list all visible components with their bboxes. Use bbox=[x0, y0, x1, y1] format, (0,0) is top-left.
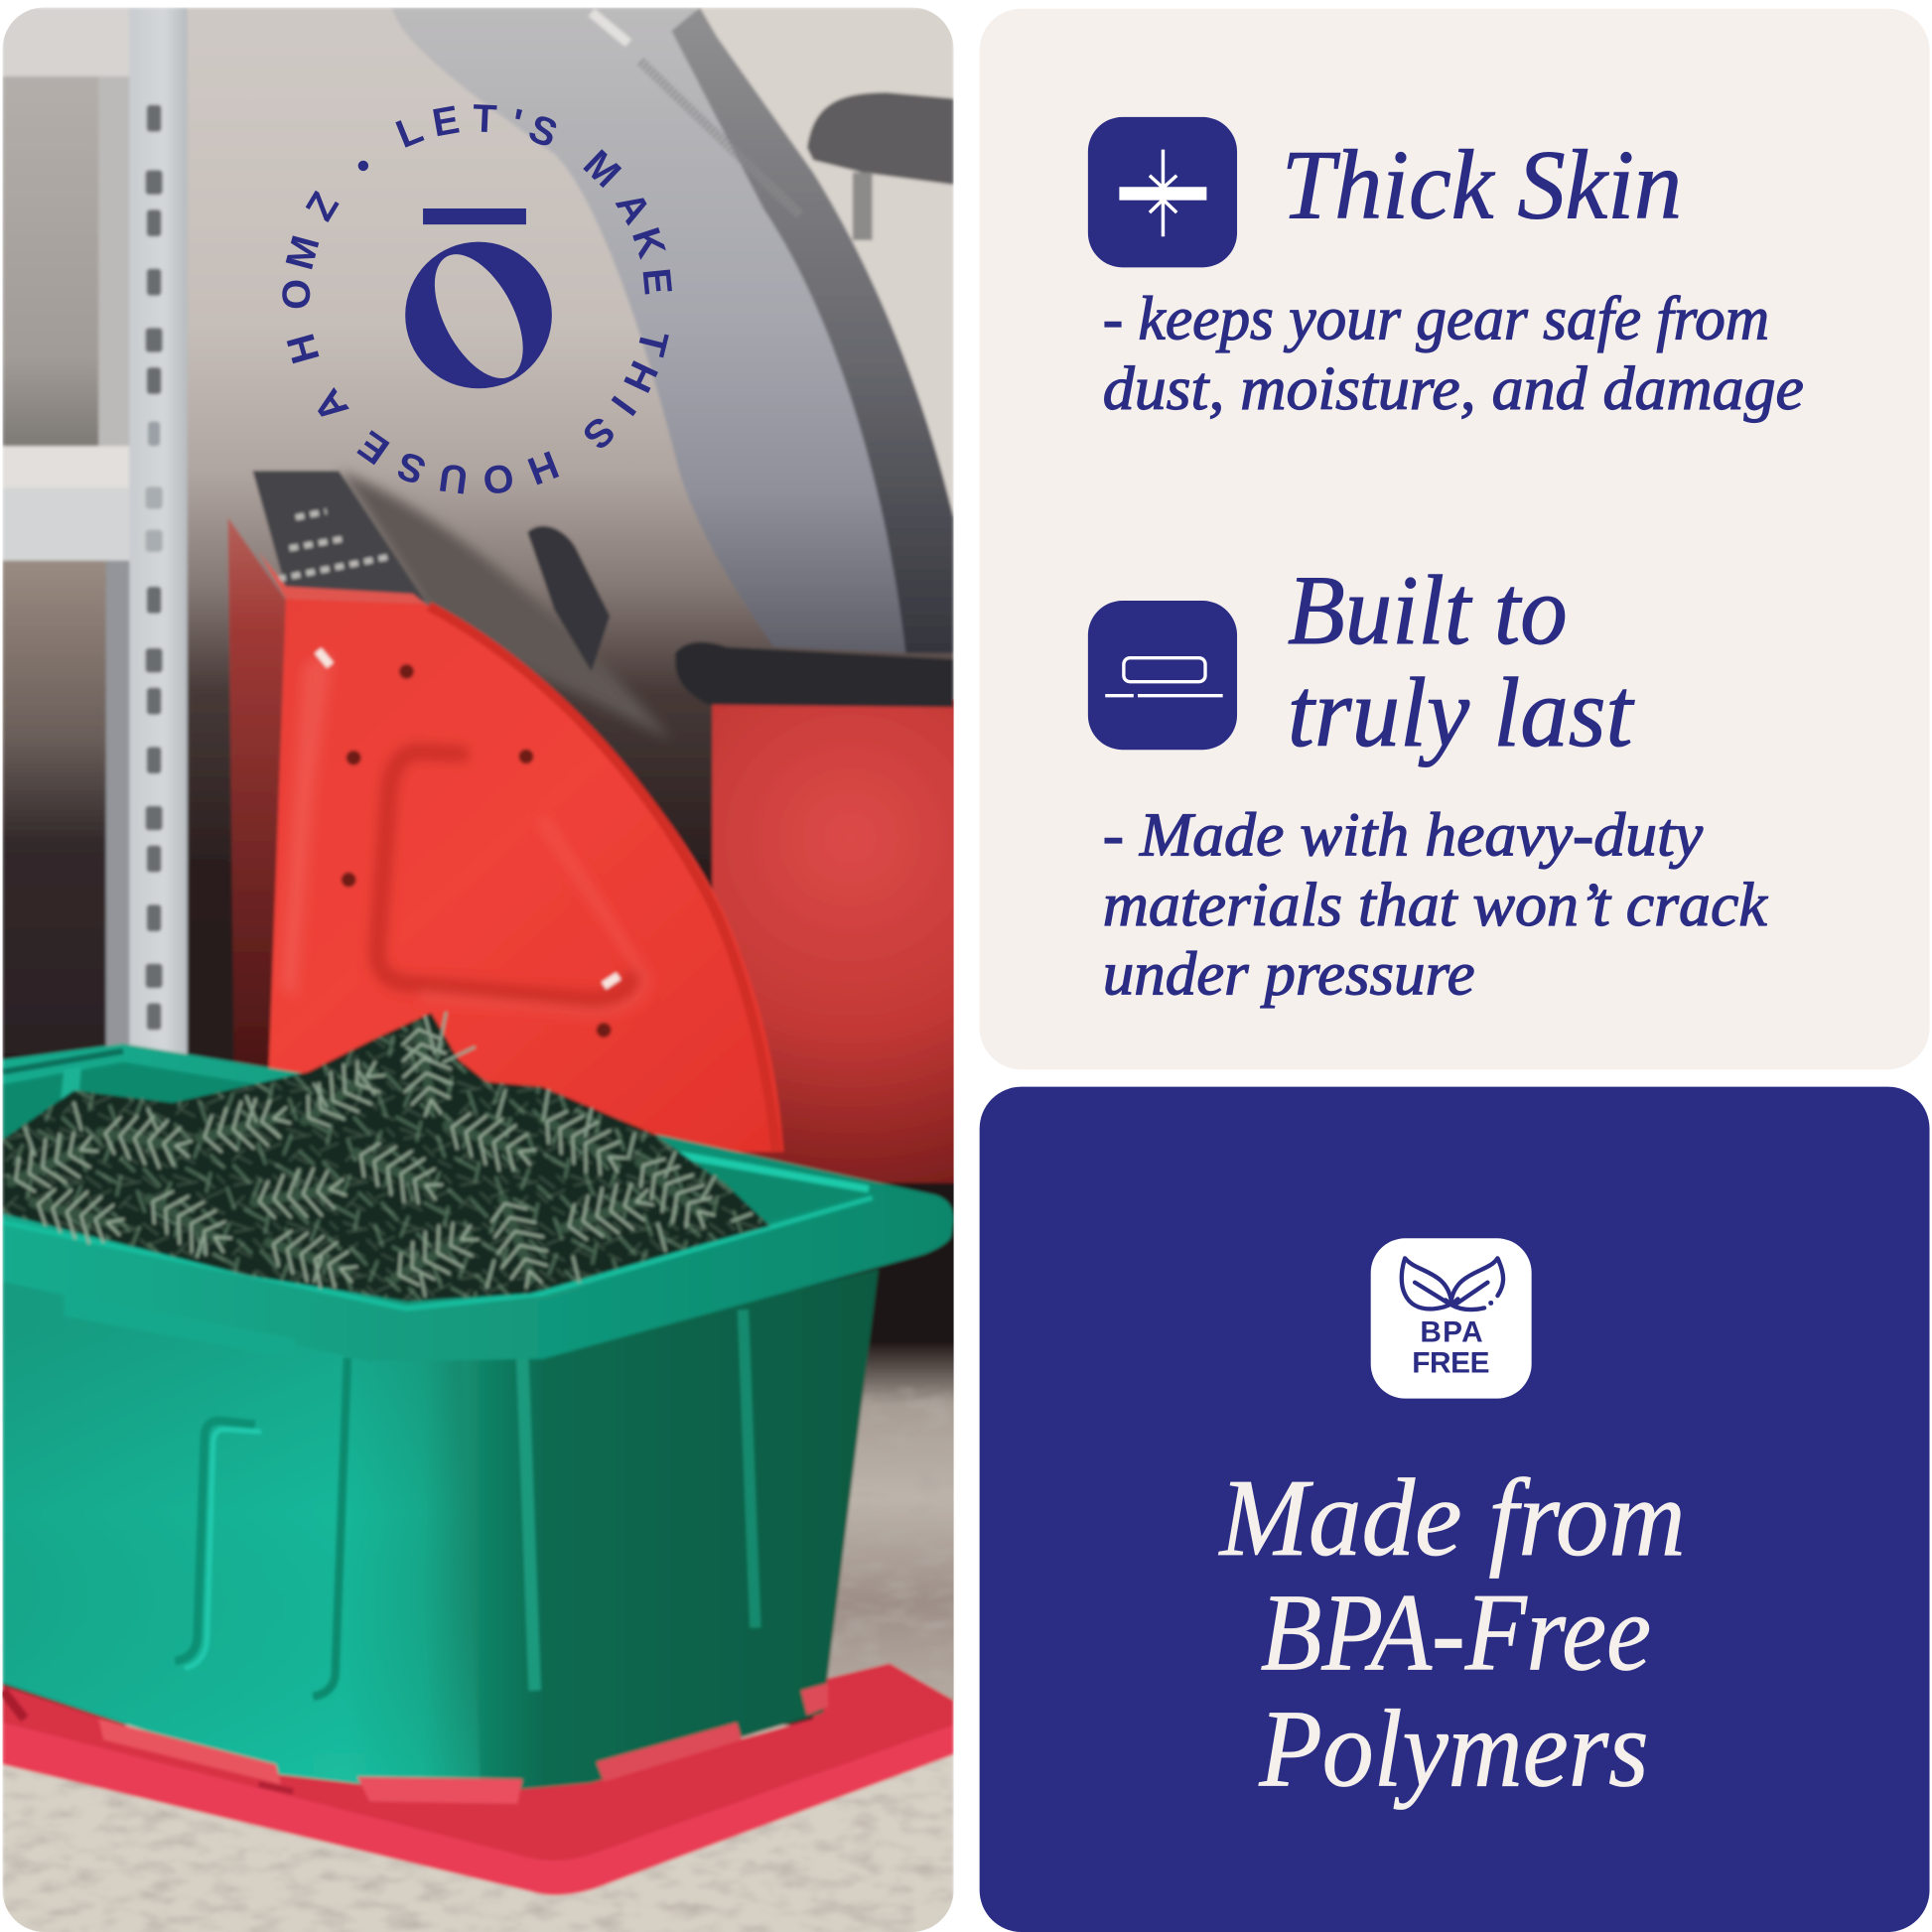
text: thick skin description: - keeps your gear safe from bbox=[1103, 285, 1769, 352]
circular tagline: S bbox=[391, 443, 432, 492]
circular tagline: T bbox=[628, 326, 676, 360]
circular tagline: T bbox=[472, 96, 497, 141]
heading: Made from BPA-Free Polymers bbox=[1218, 1456, 1686, 1810]
bin rim bbox=[2, 1043, 954, 1361]
circular tagline: M bbox=[575, 142, 628, 196]
tagline dot bbox=[358, 161, 368, 171]
circular tagline: M bbox=[278, 231, 329, 274]
red fin panel bbox=[269, 599, 783, 1152]
circular tagline: I bbox=[603, 388, 644, 423]
circular tagline: E bbox=[350, 422, 397, 473]
panel: durability features bbox=[980, 9, 1930, 1069]
heading: Built to truly last bbox=[1288, 557, 1635, 767]
icon: BPA free leaves badge: BPA bbox=[1420, 1316, 1483, 1349]
circular tagline: S bbox=[523, 106, 563, 157]
circular tagline: L bbox=[390, 107, 429, 157]
heading: Made from BPA-Free Polymers: BPA-Free bbox=[1261, 1572, 1651, 1695]
circular tagline: S bbox=[574, 408, 623, 458]
circular tagline: O bbox=[275, 278, 319, 311]
heading: Thick Skin: Thick Skin bbox=[1282, 132, 1682, 240]
circular tagline: Z bbox=[298, 185, 347, 228]
text: built to last description: materials that won’t crack bbox=[1103, 872, 1768, 939]
circular tagline: E bbox=[429, 98, 463, 146]
logo: circular tagline with O-macron mark bbox=[275, 96, 680, 502]
green bin bbox=[2, 1269, 879, 1795]
text: thick skin description: dust, moisture, and damage bbox=[1103, 355, 1804, 423]
letter O mark bbox=[405, 242, 552, 388]
heading: Made from BPA-Free Polymers: Polymers bbox=[1258, 1687, 1649, 1810]
text: built to last description: under pressure bbox=[1103, 941, 1475, 1009]
circular tagline: U bbox=[436, 455, 471, 501]
heading: Built to truly last: Built to bbox=[1288, 557, 1568, 665]
text: built to last description bbox=[1103, 801, 1768, 1009]
lid tabs in front of bin bbox=[98, 1719, 281, 1784]
circular tagline: H bbox=[279, 329, 329, 368]
photo panel: garage scene with storage bins bbox=[1, 7, 961, 1932]
heading: Made from BPA-Free Polymers: Made from bbox=[1218, 1456, 1686, 1580]
pine garland bbox=[1, 1013, 770, 1302]
panel: BPA free bbox=[980, 1087, 1930, 1932]
circular tagline: H bbox=[615, 354, 666, 399]
circular tagline bbox=[275, 96, 680, 502]
circular tagline: K bbox=[623, 222, 674, 263]
icon: thick skin bbox=[1088, 117, 1237, 267]
text: thick skin description bbox=[1103, 285, 1804, 423]
circular tagline: ' bbox=[507, 101, 526, 146]
macron bar bbox=[423, 208, 526, 224]
circular tagline: O bbox=[481, 455, 516, 502]
icon: BPA free leaves badge bbox=[1371, 1238, 1532, 1399]
heading: Built to truly last: truly last bbox=[1288, 659, 1635, 767]
text: built to last description: - Made with heavy-duty bbox=[1103, 801, 1704, 869]
circular tagline: H bbox=[522, 442, 564, 493]
icon: BPA free leaves badge: FREE bbox=[1412, 1347, 1489, 1380]
circular tagline: A bbox=[305, 381, 357, 430]
red lid under the bin bbox=[2, 1662, 954, 1863]
icon: built to last bbox=[1088, 601, 1237, 750]
circular tagline: E bbox=[633, 266, 680, 297]
circular tagline: A bbox=[607, 185, 659, 231]
